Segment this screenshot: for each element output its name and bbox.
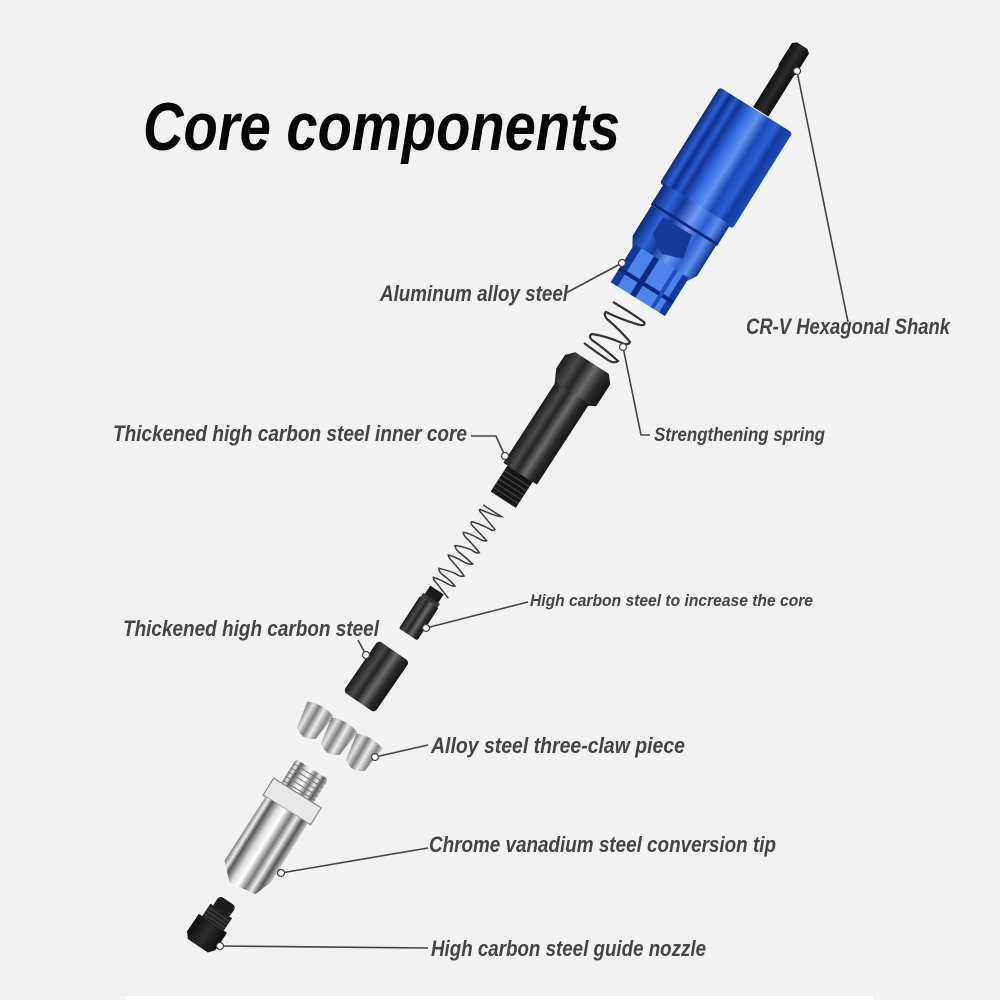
callout: three-claw piece: Alloy steel three-claw piece — [430, 733, 685, 758]
callout: CR-V hexagonal shank — [746, 68, 951, 339]
claw two — [315, 715, 359, 761]
callout: CR-V hexagonal shank: CR-V Hexagonal Shank — [746, 314, 951, 339]
callout: conversion tip: Chrome vanadium steel conversion tip — [429, 832, 776, 857]
callout: high carbon steel core: High carbon steel to increase the core — [530, 591, 813, 610]
callout: inner core — [113, 421, 508, 460]
callout: conversion tip — [278, 832, 776, 876]
claw three — [340, 731, 384, 777]
callout: three-claw piece — [372, 733, 685, 760]
callout: guide nozzle — [216, 936, 706, 961]
title: Core components — [143, 89, 620, 165]
part: hexagonal shank — [752, 40, 811, 117]
part: chrome conversion tip — [214, 754, 336, 903]
part: blue aluminum body — [601, 87, 792, 322]
callout: strengthening spring: Strengthening spring — [654, 425, 825, 446]
callout: high carbon steel core — [422, 591, 813, 632]
callout: aluminum alloy steel: Aluminum alloy steel — [379, 281, 569, 306]
part: sleeve — [343, 640, 410, 713]
claw one — [291, 699, 335, 745]
part: strengthening spring — [584, 302, 644, 362]
part: three claws — [291, 699, 384, 777]
part: guide nozzle — [184, 891, 242, 955]
bottom white strip — [125, 996, 873, 1000]
callout: thickened high carbon steel: Thickened high carbon steel — [123, 616, 380, 641]
callout: inner core: Thickened high carbon steel inner core — [113, 421, 467, 446]
part: small core — [399, 584, 446, 640]
part: inner core — [481, 348, 615, 514]
callout: thickened high carbon steel — [123, 616, 380, 658]
part: long spring — [433, 505, 502, 598]
callout: aluminum alloy steel — [379, 260, 626, 306]
callout: strengthening spring — [620, 344, 825, 446]
callout: guide nozzle: High carbon steel guide nozzle — [431, 936, 706, 961]
